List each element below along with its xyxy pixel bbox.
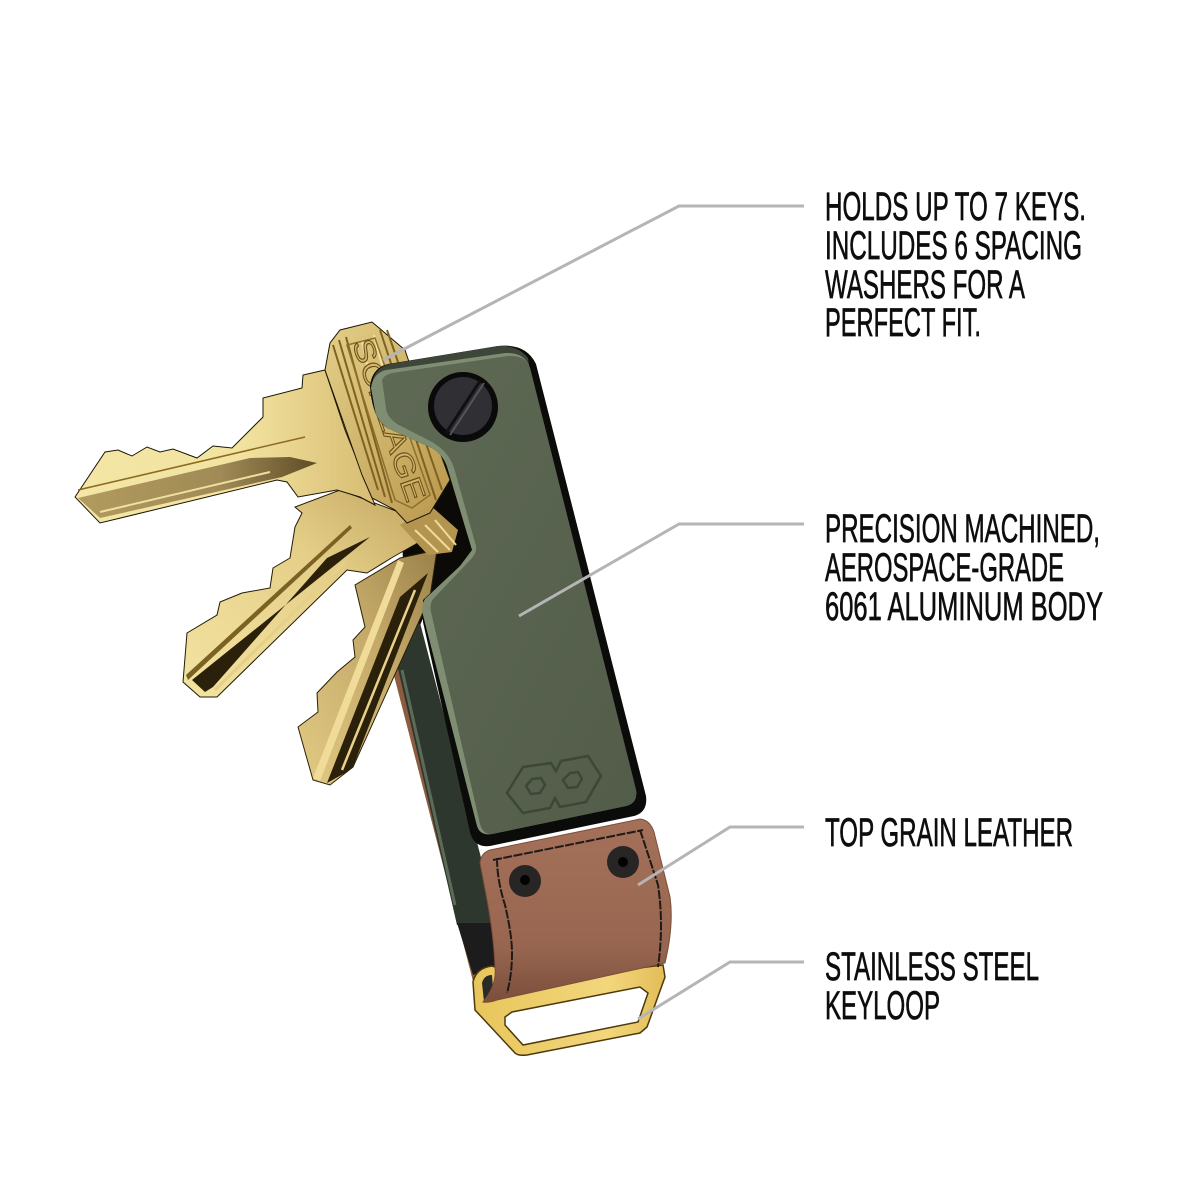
callout: keys capacity: WASHERS FOR A xyxy=(825,263,1025,307)
stitching xyxy=(493,830,661,993)
leader lines xyxy=(383,206,804,1019)
leather tab xyxy=(480,819,671,1002)
callout: keyloop xyxy=(825,945,1039,1028)
stainless steel keyloop xyxy=(473,965,665,1055)
body green face xyxy=(382,356,636,834)
back plate and leather strap side xyxy=(392,615,498,985)
keys xyxy=(75,322,458,785)
rivets xyxy=(509,846,639,897)
key: top xyxy=(75,322,450,523)
key: stacked heads xyxy=(400,505,458,555)
aluminum body xyxy=(370,346,646,846)
body top band xyxy=(372,346,530,384)
key: middle xyxy=(183,490,423,697)
key head with brand stamp xyxy=(325,322,450,523)
callout: keyloop: STAINLESS STEEL xyxy=(825,945,1039,989)
key: bottom xyxy=(298,550,437,785)
logo xyxy=(507,756,601,813)
screw xyxy=(428,372,498,442)
callout: keys capacity xyxy=(825,185,1086,345)
body black silhouette xyxy=(370,346,646,846)
body bevel xyxy=(371,353,636,834)
shadow cavity behind keys xyxy=(385,425,474,625)
callout: keyloop: KEYLOOP xyxy=(825,984,940,1028)
callout: aluminum body xyxy=(825,507,1103,629)
key head with brand stamp: SCHLAGE xyxy=(345,335,431,506)
callout: keys capacity: PERFECT FIT. xyxy=(825,301,981,345)
